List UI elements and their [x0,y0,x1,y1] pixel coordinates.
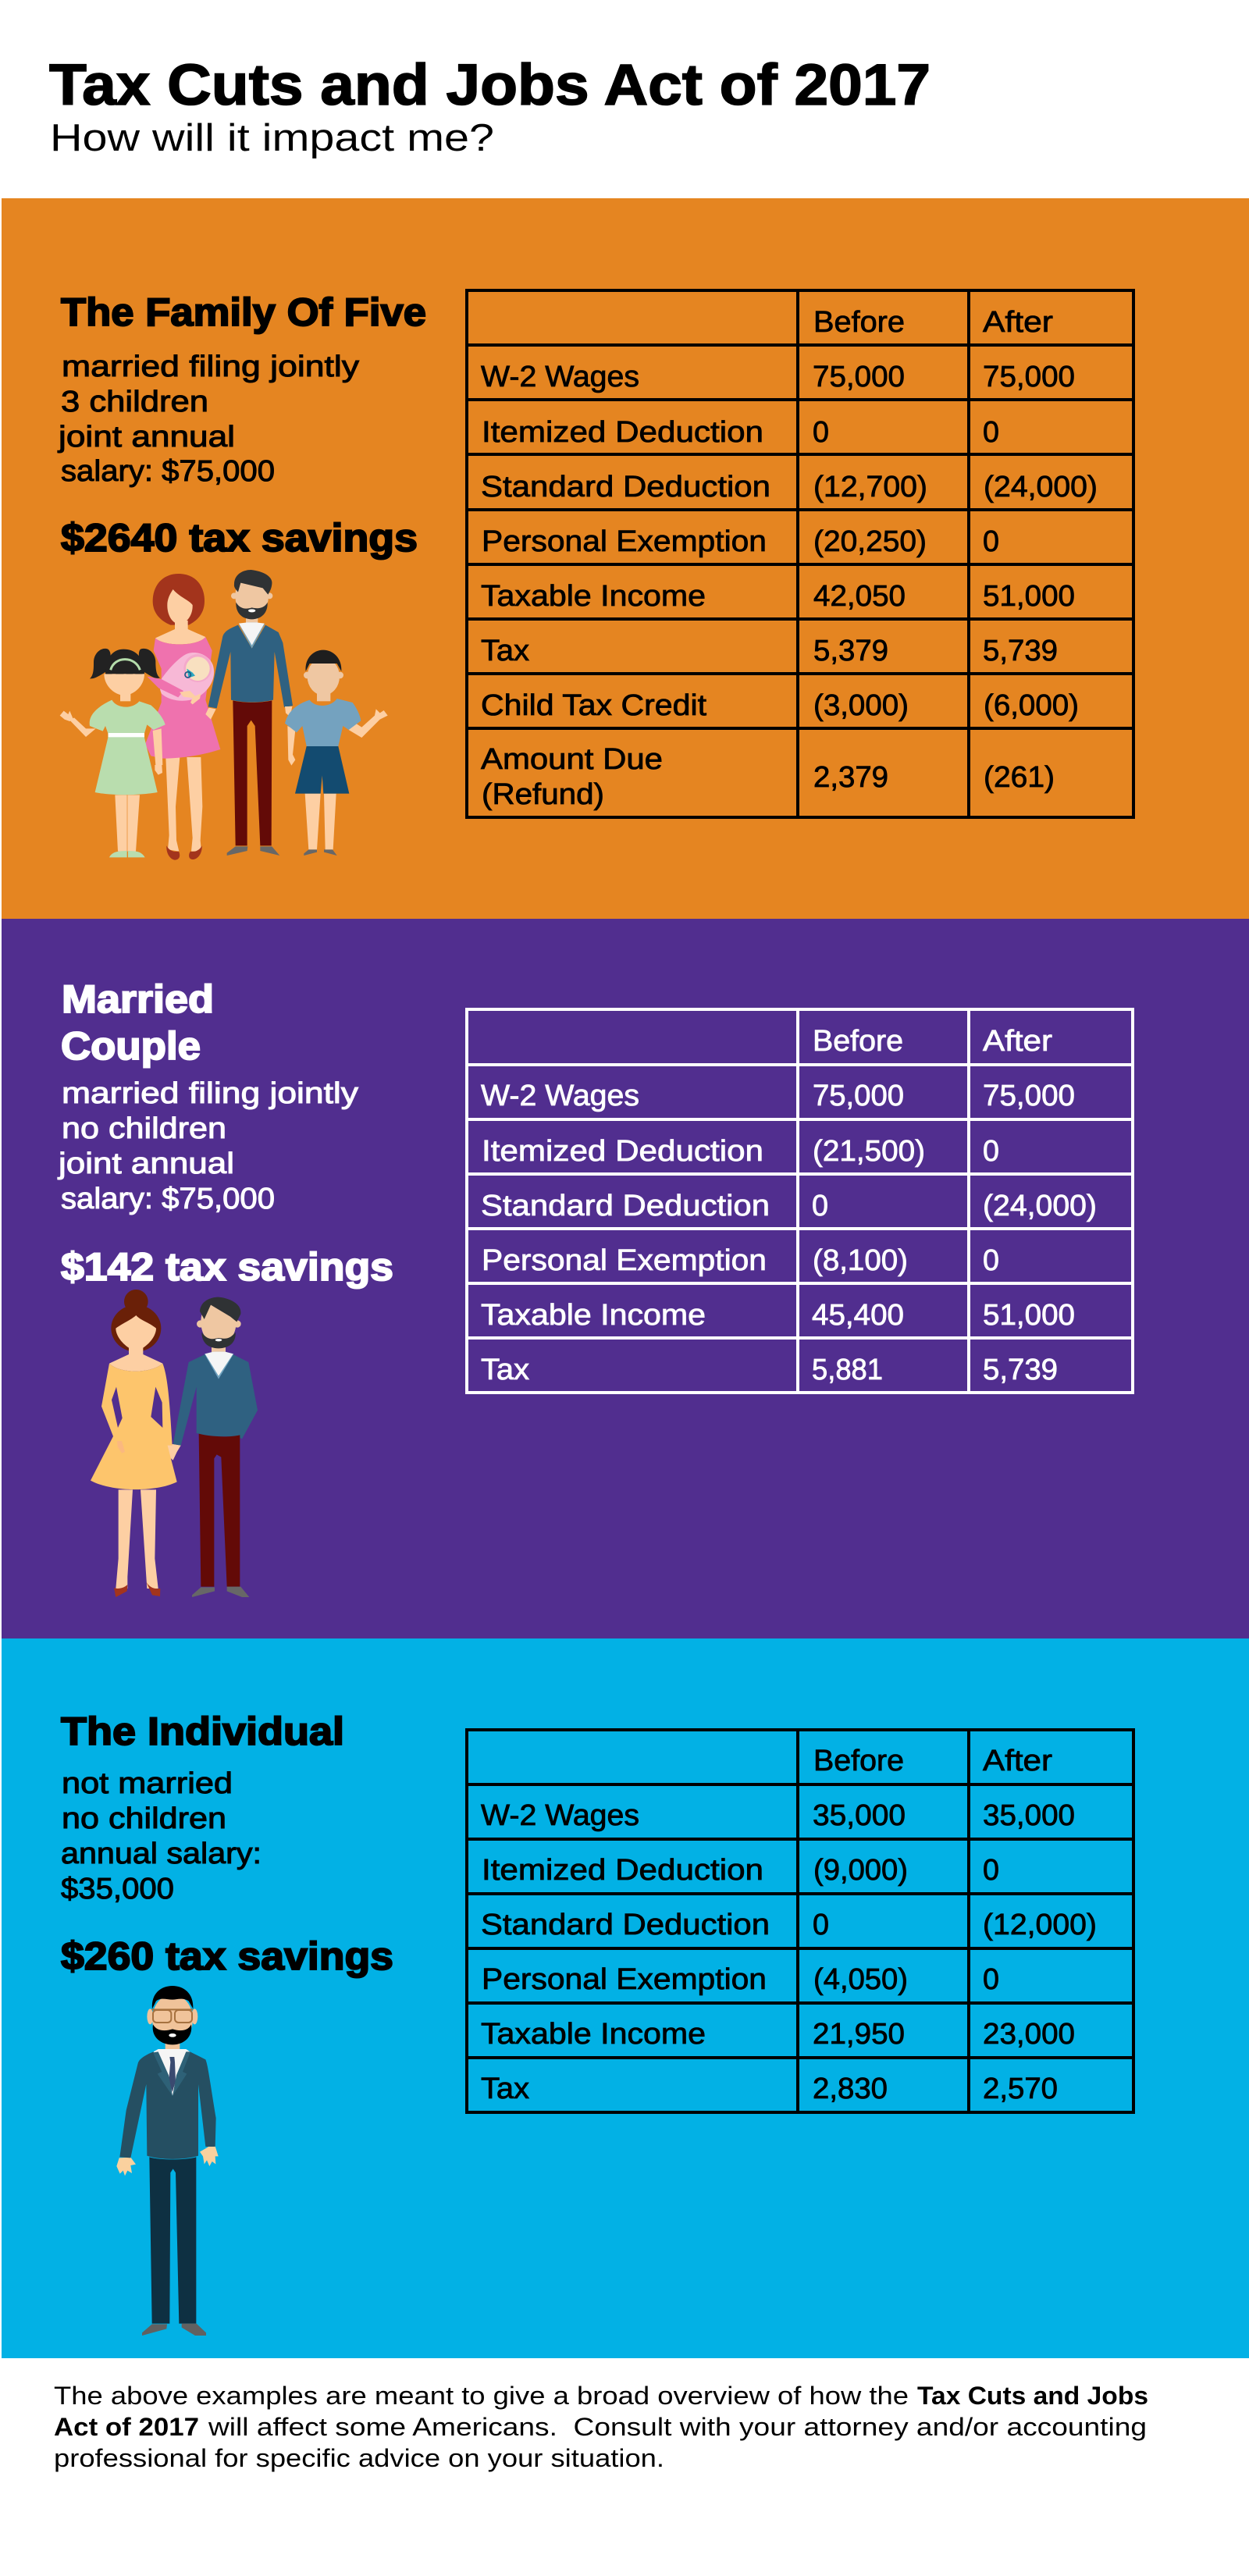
row: taxable income: 51,000 [983,1299,1075,1332]
row: standard deduction: 0 [812,1190,828,1222]
table: the individual [465,1728,1135,2114]
row: tax: 2,570 [983,2073,1058,2105]
row: standard deduction: (12,700) [813,471,927,503]
row: tax [481,635,1058,667]
row: itemized deduction: Itemized Deduction [482,416,763,449]
row: standard deduction [481,471,1098,503]
text block: individual details: not married [62,1767,233,1800]
row: amount due [481,743,1055,811]
text block: couple details: salary: $75,000 [61,1183,275,1215]
row: personal exemption: Personal Exemption [482,1963,767,1996]
row: personal exemption: 0 [983,1963,999,1996]
row: taxable income: 51,000 [983,580,1075,613]
panel: married couple [2,919,1249,1638]
row: standard deduction [481,1909,1097,1941]
row: amount due: (Refund) [482,778,604,811]
text block: family details [58,350,359,488]
text block: individual details [61,1767,262,1905]
footer disclaimer: will affect some Americans. Consult with your attorney and/or accounting [208,2413,1147,2441]
panel: the family of five [2,198,1249,919]
row: tax: Tax [481,635,529,667]
icon: couple illustration [91,1290,258,1597]
row: personal exemption: (20,250) [813,525,927,558]
row: standard deduction: Standard Deduction [481,1190,770,1222]
row: standard deduction: 0 [813,1909,829,1941]
row: personal exemption: (8,100) [813,1244,908,1277]
footer disclaimer: professional for specific advice on your situation. [54,2444,664,2472]
table header [813,1025,1052,1058]
row: personal exemption: (4,050) [813,1963,908,1996]
row: wages [481,361,1075,393]
row: standard deduction: (24,000) [983,1190,1097,1222]
row: taxable income: Taxable Income [481,1299,706,1332]
row: itemized deduction: (9,000) [813,1854,908,1887]
row: wages: 35,000 [813,1799,906,1832]
heading: married couple: Married [62,977,214,1021]
footer disclaimer: The above examples are meant to give a broad overview of how the [54,2382,909,2410]
heading: the family of five: The Family Of Five [61,290,426,334]
row: personal exemption: 0 [983,525,999,558]
row: standard deduction: Standard Deduction [481,471,770,503]
row: wages: 75,000 [813,1080,904,1112]
row: child tax credit: (6,000) [984,689,1079,722]
row: tax [481,2073,1058,2105]
callout: tax savings: $260 tax savings [61,1934,393,1978]
row: standard deduction: (12,000) [983,1909,1097,1941]
row: taxable income [481,580,1075,613]
row: tax: Tax [481,2073,529,2105]
row: tax: Tax [481,1354,529,1386]
row: standard deduction [481,1190,1097,1222]
table header [813,1745,1052,1777]
row: child tax credit: (3,000) [813,689,909,722]
footer disclaimer: Act of 2017 [54,2413,199,2441]
icon: family illustration [60,570,388,860]
row: itemized deduction [482,416,999,449]
row: tax: 5,739 [983,635,1058,667]
row: personal exemption [482,1963,999,1996]
icon: father [205,570,293,856]
row: tax [481,1354,1058,1386]
icon: boy [285,650,388,856]
table header: Before [813,306,905,339]
table: married couple [465,1008,1134,1394]
footer disclaimer: Tax Cuts and Jobs [917,2382,1148,2410]
row: taxable income: 23,000 [983,2018,1075,2051]
row: taxable income: 21,950 [813,2018,905,2051]
table header: After [983,1025,1052,1058]
heading: the individual: The Individual [61,1710,344,1753]
text block: individual details: no children [62,1802,226,1835]
row: personal exemption [482,525,999,558]
row: amount due: Amount Due [481,743,663,776]
text block: family details: joint annual [58,421,235,454]
row: tax: 5,379 [813,635,888,667]
callout: tax savings: $2640 tax savings [61,516,418,560]
row: itemized deduction: Itemized Deduction [482,1135,763,1168]
row: personal exemption: Personal Exemption [482,1244,767,1277]
row: taxable income [481,1299,1075,1332]
row: standard deduction: Standard Deduction [481,1909,770,1941]
row: taxable income [481,2018,1075,2051]
row: wages: 75,000 [813,361,905,393]
heading: married couple [61,977,214,1068]
text block: family details: salary: $75,000 [61,455,275,488]
row: child tax credit [481,689,1079,722]
text block: couple details: married filing jointly [62,1077,358,1110]
heading: married couple: Couple [61,1024,201,1068]
row: wages [481,1799,1075,1832]
footer disclaimer [54,2382,1148,2472]
row: personal exemption: 0 [983,1244,999,1277]
row: itemized deduction: 0 [983,416,999,449]
row: itemized deduction: Itemized Deduction [482,1854,763,1887]
text block: couple details [58,1077,358,1215]
icon: man [173,1297,258,1597]
row: itemized deduction [482,1135,999,1168]
table: family of five [465,289,1135,819]
table header: Before [813,1025,903,1058]
row: itemized deduction: (21,500) [813,1135,925,1168]
row: wages [481,1080,1075,1112]
row: personal exemption: Personal Exemption [482,525,767,558]
text block: individual details: annual salary: [61,1838,262,1870]
row: itemized deduction: 0 [813,416,829,449]
row: tax: 5,881 [812,1354,883,1386]
icon: woman [91,1290,181,1597]
row: itemized deduction [482,1854,999,1887]
table header [813,306,1053,339]
table header: After [983,1745,1052,1777]
icon: girl [60,649,165,857]
icon: mother [145,574,220,860]
row: tax: 5,739 [983,1354,1058,1386]
row: itemized deduction: 0 [983,1854,999,1887]
text block: individual details: $35,000 [61,1873,174,1905]
table header: After [983,306,1053,339]
text block: couple details: joint annual [58,1147,234,1180]
row: amount due: 2,379 [813,761,888,794]
callout: tax savings: $142 tax savings [61,1245,393,1289]
row: itemized deduction: 0 [983,1135,999,1168]
table header: Before [813,1745,904,1777]
row: taxable income: Taxable Income [481,580,706,613]
row: wages: W-2 Wages [481,1080,639,1112]
row: taxable income: 45,400 [812,1299,904,1332]
row: wages: W-2 Wages [481,1799,639,1832]
row: wages: 75,000 [983,1080,1075,1112]
row: wages: W-2 Wages [481,361,639,393]
text block: couple details: no children [62,1112,226,1145]
row: tax: 2,830 [813,2073,888,2105]
title: Tax Cuts and Jobs Act of 2017 [49,52,931,117]
subtitle: How will it impact me? [50,117,494,159]
row: wages: 75,000 [983,361,1075,393]
text block: family details: married filing jointly [62,350,359,383]
icon: businessman illustration [116,1986,219,2336]
row: amount due: (261) [984,761,1055,794]
row: taxable income: Taxable Income [481,2018,706,2051]
row: wages: 35,000 [983,1799,1075,1832]
row: child tax credit: Child Tax Credit [481,689,706,722]
text block: family details: 3 children [61,386,208,418]
row: taxable income: 42,050 [813,580,906,613]
row: standard deduction: (24,000) [984,471,1098,503]
panel: the individual [2,1638,1249,2358]
row: personal exemption [482,1244,999,1277]
